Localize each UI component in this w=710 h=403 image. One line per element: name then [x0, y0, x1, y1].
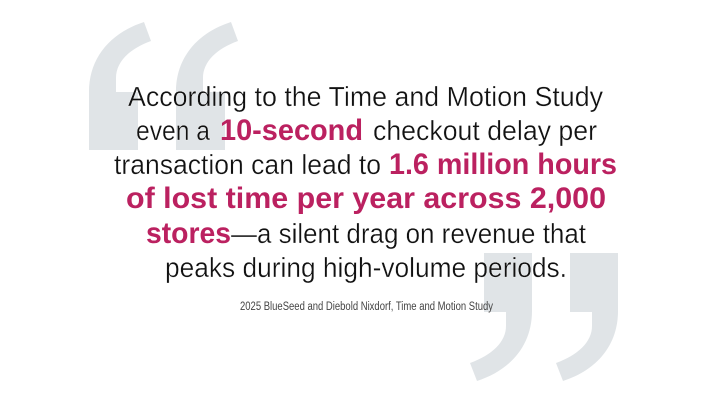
quote text: transaction can lead to	[114, 149, 381, 180]
quote text: —a silent drag on revenue that	[231, 218, 586, 249]
quote text: stores	[146, 217, 231, 250]
source citation: 2025 BlueSeed and Diebold Nixdorf, Time and Motion Study	[240, 301, 493, 313]
quote text: checkout delay per	[373, 115, 597, 146]
quote text: According to the Time and Motion Study	[128, 81, 603, 112]
icon: closing quotation marks	[470, 253, 618, 381]
quote text: peaks during high-volume periods.	[165, 252, 567, 283]
quote text: 1.6 million hours	[389, 148, 617, 181]
quote text: even a	[136, 115, 211, 146]
quote text: 10-second	[220, 114, 363, 147]
quote text: of lost time per year across 2,000	[126, 182, 606, 215]
quote text	[114, 81, 617, 283]
icon: opening quotation marks	[89, 22, 238, 150]
